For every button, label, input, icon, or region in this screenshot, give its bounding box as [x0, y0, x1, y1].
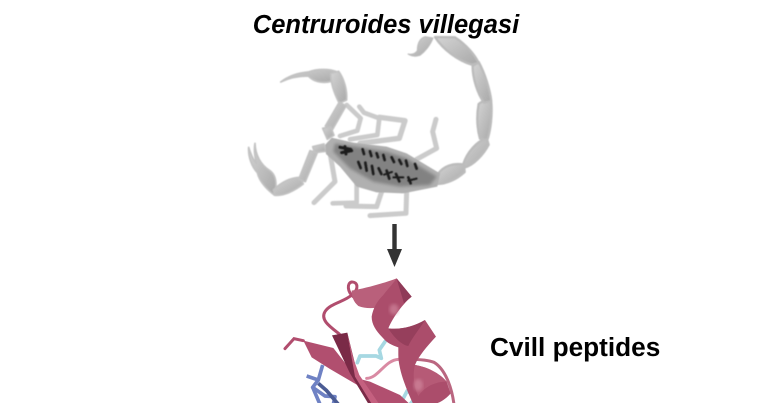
- scorpion upper pincer: [281, 69, 347, 139]
- scorpion tail: [408, 37, 492, 184]
- alpha helix: [372, 278, 451, 403]
- scorpion lower pincer: [249, 143, 326, 195]
- title: species name: Centruroides villegasi: [253, 11, 520, 39]
- cyan side chains: [357, 342, 416, 403]
- helix highlights: [389, 304, 399, 315]
- scorpion body: [325, 138, 440, 193]
- scorpion illustration: [249, 37, 492, 216]
- back ribbon of helix: [352, 278, 403, 308]
- blue side chain: [307, 365, 338, 403]
- arrow: [387, 224, 402, 267]
- lower strand: [367, 359, 454, 403]
- loop coil: [285, 282, 357, 349]
- scorpion legs: [314, 105, 437, 216]
- peptide label: Cvill peptides: [490, 332, 660, 362]
- peptide structure: [285, 278, 454, 403]
- scorpion abdomen markings: [340, 147, 417, 183]
- beta strands: [303, 341, 410, 403]
